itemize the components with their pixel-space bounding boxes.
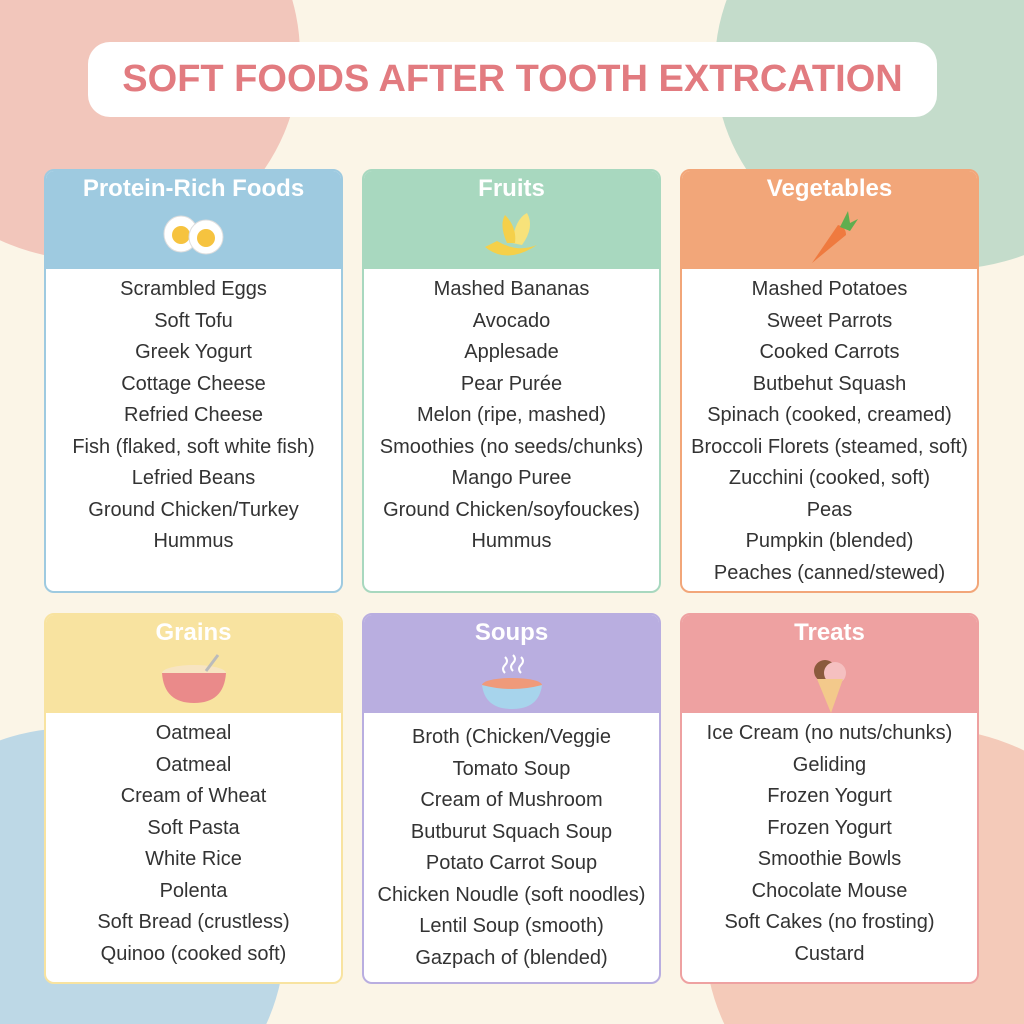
list: protein bbox=[72, 278, 315, 552]
list: protein: Ground Chicken/Turkey bbox=[88, 498, 299, 520]
list: fruits: Mashed Bananas bbox=[434, 278, 589, 300]
list: protein: Scrambled Eggs bbox=[120, 278, 267, 300]
list: soups: Butburut Squach Soup bbox=[411, 820, 612, 842]
header: vegetables: Vegetables bbox=[767, 175, 892, 202]
list: grains: Cream of Wheat bbox=[121, 785, 266, 807]
list: soups: Lentil Soup (smooth) bbox=[419, 915, 604, 937]
title bbox=[88, 42, 937, 117]
list: grains: Soft Bread (crustless) bbox=[97, 911, 290, 933]
panel: soups bbox=[362, 613, 661, 984]
list: fruits bbox=[380, 278, 643, 552]
panel: treats bbox=[680, 613, 979, 984]
list: vegetables bbox=[691, 278, 968, 584]
list: treats bbox=[707, 722, 952, 964]
title: SOFT FOODS AFTER TOOTH EXTRCATION bbox=[122, 58, 903, 100]
header: fruits bbox=[364, 171, 659, 269]
header: soups bbox=[364, 615, 659, 713]
panel: vegetables bbox=[680, 169, 979, 593]
list: treats: Geliding bbox=[793, 754, 866, 776]
header: protein: Protein-Rich Foods bbox=[83, 175, 304, 202]
list: treats: Custard bbox=[794, 942, 865, 964]
list: grains: Oatmeal bbox=[156, 754, 231, 776]
list: fruits: Hummus bbox=[471, 530, 552, 552]
list: vegetables: Zucchini (cooked, soft) bbox=[729, 467, 930, 489]
header: treats: Treats bbox=[794, 619, 865, 646]
list: soups bbox=[378, 726, 645, 968]
list: grains: White Rice bbox=[145, 848, 242, 870]
list: fruits: Mango Puree bbox=[451, 467, 572, 489]
list: grains: Oatmeal bbox=[156, 722, 231, 744]
list: soups: Broth (Chicken/Veggie bbox=[412, 726, 611, 748]
list: vegetables: Spinach (cooked, creamed) bbox=[707, 404, 952, 426]
panel: grains bbox=[44, 613, 343, 984]
list: treats: Chocolate Mouse bbox=[752, 880, 907, 902]
panel: protein bbox=[44, 169, 343, 593]
list: vegetables: Butbehut Squash bbox=[753, 372, 906, 394]
list: treats: Frozen Yogurt bbox=[767, 816, 892, 838]
header: vegetables bbox=[682, 171, 977, 269]
list: vegetables: Mashed Potatoes bbox=[752, 278, 907, 300]
list: protein: Soft Tofu bbox=[154, 310, 233, 332]
list: protein: Refried Cheese bbox=[124, 404, 263, 426]
list: treats: Frozen Yogurt bbox=[767, 785, 892, 807]
list: treats: Soft Cakes (no frosting) bbox=[724, 911, 935, 933]
list: vegetables: Cooked Carrots bbox=[759, 341, 900, 363]
header: fruits: Fruits bbox=[478, 175, 545, 202]
list: protein: Lefried Beans bbox=[132, 467, 255, 489]
list: treats: Smoothie Bowls bbox=[758, 848, 901, 870]
list: fruits: Avocado bbox=[473, 310, 550, 332]
list: fruits: Smoothies (no seeds/chunks) bbox=[380, 436, 643, 458]
list: grains: Soft Pasta bbox=[147, 816, 240, 838]
list: vegetables: Peaches (canned/stewed) bbox=[714, 562, 945, 584]
header: grains bbox=[46, 615, 341, 713]
list: soups: Potato Carrot Soup bbox=[426, 852, 597, 874]
header: soups: Soups bbox=[475, 619, 548, 646]
header: grains: Grains bbox=[155, 619, 232, 646]
list: fruits: Ground Chicken/soyfouckes) bbox=[383, 498, 640, 520]
list: grains: Quinoo (cooked soft) bbox=[101, 942, 286, 964]
list: fruits: Pear Purée bbox=[461, 372, 562, 394]
list: protein: Cottage Cheese bbox=[121, 372, 266, 394]
list: vegetables: Peas bbox=[807, 498, 852, 520]
list: fruits: Applesade bbox=[464, 341, 559, 363]
list: vegetables: Sweet Parrots bbox=[767, 310, 892, 332]
header: protein bbox=[46, 171, 341, 269]
list: soups: Cream of Mushroom bbox=[420, 789, 603, 811]
panel: fruits bbox=[362, 169, 661, 593]
list: soups: Tomato Soup bbox=[453, 758, 570, 780]
list: soups: Chicken Noudle (soft noodles) bbox=[378, 884, 645, 906]
list: soups: Gazpach of (blended) bbox=[415, 946, 608, 968]
list: grains: Polenta bbox=[160, 880, 227, 902]
list: protein: Greek Yogurt bbox=[135, 341, 252, 363]
list: vegetables: Broccoli Florets (steamed, soft) bbox=[691, 436, 968, 458]
list: protein: Fish (flaked, soft white fish) bbox=[72, 436, 315, 458]
list: protein: Hummus bbox=[153, 530, 234, 552]
list: treats: Ice Cream (no nuts/chunks) bbox=[707, 722, 952, 744]
list: grains bbox=[97, 722, 290, 964]
list: fruits: Melon (ripe, mashed) bbox=[417, 404, 606, 426]
list: vegetables: Pumpkin (blended) bbox=[746, 530, 913, 552]
header: treats bbox=[682, 615, 977, 713]
